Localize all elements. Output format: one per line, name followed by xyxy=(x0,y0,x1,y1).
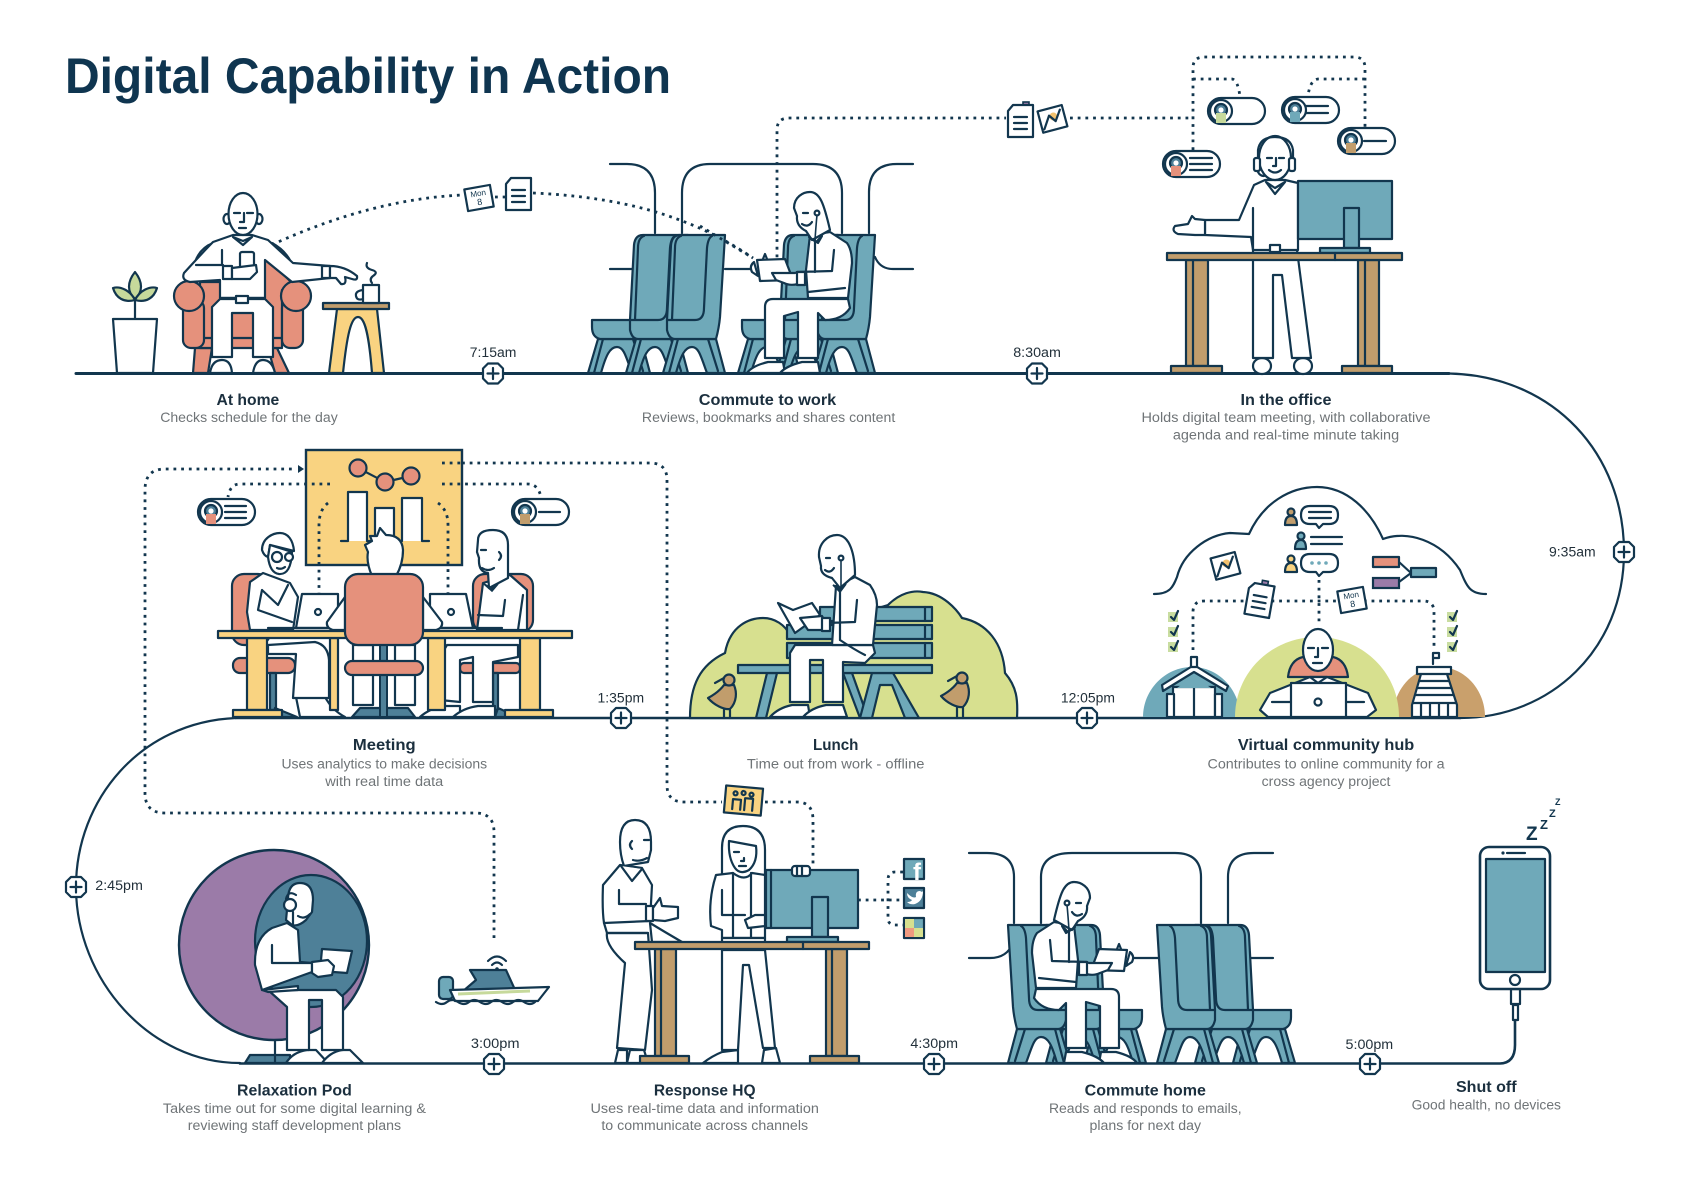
icon: phone with charging cable xyxy=(1480,847,1550,1020)
caption: in the office xyxy=(1141,392,1431,442)
man on right xyxy=(420,530,527,717)
time labels: 4:30pm xyxy=(910,1035,958,1051)
time labels: 8:30am xyxy=(1013,344,1061,360)
caption: at home xyxy=(160,392,338,425)
monitor xyxy=(766,866,858,942)
central person from behind xyxy=(327,528,442,717)
beehive building xyxy=(1412,653,1457,717)
person reading phone xyxy=(183,193,357,373)
social icons: f xyxy=(913,859,922,886)
time labels: 3:00pm xyxy=(471,1035,520,1051)
cloud outline xyxy=(1154,487,1486,594)
icon: calendar xyxy=(464,185,494,211)
caption: response HQ: Response HQ xyxy=(654,1082,756,1099)
sleeping Z letters: Z xyxy=(1526,824,1538,845)
bush xyxy=(690,591,1017,718)
dotted connector: board to response HQ xyxy=(462,463,813,867)
standing man xyxy=(603,820,682,1063)
train windows xyxy=(969,853,1273,958)
sleeping Z letters xyxy=(1526,797,1561,845)
org diagram xyxy=(1373,557,1436,588)
caption: virtual community hub: Contributes to online community for a xyxy=(1208,756,1445,772)
caption: commute home: Commute home xyxy=(1085,1082,1206,1099)
monitor xyxy=(1298,181,1392,253)
train windows xyxy=(610,164,913,269)
scene: lunch xyxy=(690,535,1017,718)
person with tablet xyxy=(747,192,852,373)
coloured arches xyxy=(1143,637,1485,717)
caption: meeting: Meeting xyxy=(353,737,416,754)
scene: commute home xyxy=(969,853,1295,1063)
caption: virtual community hub: cross agency project xyxy=(1262,773,1391,789)
caption: relaxation pod xyxy=(163,1082,427,1133)
scene: at home xyxy=(113,193,389,373)
caption: lunch: Lunch xyxy=(813,737,858,754)
person reading xyxy=(770,535,877,717)
caption: shut off: Good health, no devices xyxy=(1412,1097,1561,1113)
pod chair xyxy=(179,850,369,1063)
caption: at home: At home xyxy=(216,392,280,409)
icon: calendar: Mon xyxy=(470,188,487,199)
woman with glasses xyxy=(247,533,345,717)
icon: calendar xyxy=(1337,587,1367,613)
person at laptop xyxy=(1260,629,1376,717)
caption: relaxation pod: Takes time out for some digital learning & xyxy=(163,1100,427,1116)
icon: bookmarked document xyxy=(1008,102,1033,137)
caption: response HQ: to communicate across channels xyxy=(601,1117,808,1133)
scene: response HQ xyxy=(603,785,924,1063)
time labels: 7:15am xyxy=(470,344,516,360)
icon: calendar: 8 xyxy=(476,197,483,207)
armchair xyxy=(174,243,311,373)
caption: in the office: agenda and real-time minute taking xyxy=(1173,426,1399,442)
icon: boat with wifi xyxy=(436,956,549,1004)
caption: lunch xyxy=(747,737,925,772)
icon: picture xyxy=(1211,552,1240,580)
caption: commute home: Reads and responds to emails, xyxy=(1049,1100,1242,1116)
time labels: 9:35am xyxy=(1549,543,1596,559)
caption: meeting xyxy=(281,737,487,789)
caption: meeting: with real time data xyxy=(324,773,443,789)
person in pod xyxy=(255,883,363,1063)
caption: commute to work: Commute to work xyxy=(699,392,837,409)
caption: lunch: Time out from work - offline xyxy=(747,756,925,772)
sleeping Z letters: Z xyxy=(1555,797,1561,807)
icon: calendar: Mon xyxy=(1343,590,1360,601)
social icons xyxy=(858,859,924,938)
dotted connector: commute to office xyxy=(777,118,1193,265)
caption: shut off xyxy=(1412,1079,1561,1113)
caption: commute home xyxy=(1049,1082,1242,1133)
sleeping Z letters: Z xyxy=(1540,817,1548,832)
scene: relaxation pod xyxy=(179,850,549,1063)
time labels: 1:35pm xyxy=(598,690,644,706)
desk xyxy=(1167,253,1402,373)
birds xyxy=(708,672,969,718)
scene: virtual community hub xyxy=(1143,487,1486,717)
person with headset xyxy=(1174,136,1312,374)
caption: virtual community hub xyxy=(1208,737,1445,789)
desk xyxy=(635,942,869,1063)
caption: virtual community hub: Virtual community hub xyxy=(1238,737,1414,754)
caption: in the office: Holds digital team meeting, with collaborative xyxy=(1141,409,1431,425)
side chairs xyxy=(232,574,533,710)
caption: in the office: In the office xyxy=(1241,392,1332,409)
icon: document xyxy=(1244,578,1275,618)
presentation board xyxy=(306,450,462,565)
icon: team card xyxy=(724,785,763,816)
icon: picture xyxy=(1038,105,1067,133)
caption: at home: Checks schedule for the day xyxy=(160,409,338,425)
timeline markers xyxy=(66,364,1634,1074)
team member pills xyxy=(1163,97,1395,177)
bench xyxy=(738,607,932,718)
laptops xyxy=(268,594,502,628)
seats xyxy=(588,235,875,373)
table xyxy=(218,631,572,717)
pills xyxy=(198,499,569,525)
dotted connector: pod to meeting board xyxy=(145,469,494,938)
standing woman xyxy=(703,826,780,1063)
caption: commute to work: Reviews, bookmarks and shares content xyxy=(642,409,895,425)
caption: relaxation pod: reviewing staff development plans xyxy=(188,1117,401,1133)
time labels: 2:45pm xyxy=(95,877,143,893)
dotted connector: office meeting pills xyxy=(1193,57,1365,150)
scene: commute to work xyxy=(588,164,913,373)
scene: in the office xyxy=(1163,97,1402,374)
caption: meeting: Uses analytics to make decisions xyxy=(281,756,487,772)
side table with cup xyxy=(323,263,389,373)
meeting house xyxy=(1162,657,1228,717)
time labels xyxy=(95,344,1596,1052)
caption: shut off: Shut off xyxy=(1456,1079,1517,1096)
check marks xyxy=(1168,611,1457,652)
time labels: 5:00pm xyxy=(1346,1036,1393,1052)
caption: commute to work xyxy=(642,392,895,425)
caption: response HQ: Uses real-time data and information xyxy=(591,1100,819,1116)
caption: commute home: plans for next day xyxy=(1090,1117,1201,1133)
icon: calendar: 8 xyxy=(1349,599,1356,609)
caption: response HQ xyxy=(591,1082,819,1133)
icon: document xyxy=(506,178,531,210)
arrowhead xyxy=(298,465,304,473)
icon: potted plant xyxy=(113,272,157,373)
scene: meeting xyxy=(198,450,572,717)
title: Digital Capability in Action xyxy=(65,48,671,104)
dotted connector: home to commute xyxy=(265,193,753,258)
time labels: 12:05pm xyxy=(1061,690,1115,706)
chat people and bubbles xyxy=(1285,506,1342,576)
sleeping Z letters: Z xyxy=(1549,808,1556,820)
person with tablet xyxy=(1032,882,1137,1063)
main timeline path xyxy=(76,374,1624,1064)
caption: relaxation pod: Relaxation Pod xyxy=(237,1082,352,1099)
seats xyxy=(1008,925,1295,1063)
